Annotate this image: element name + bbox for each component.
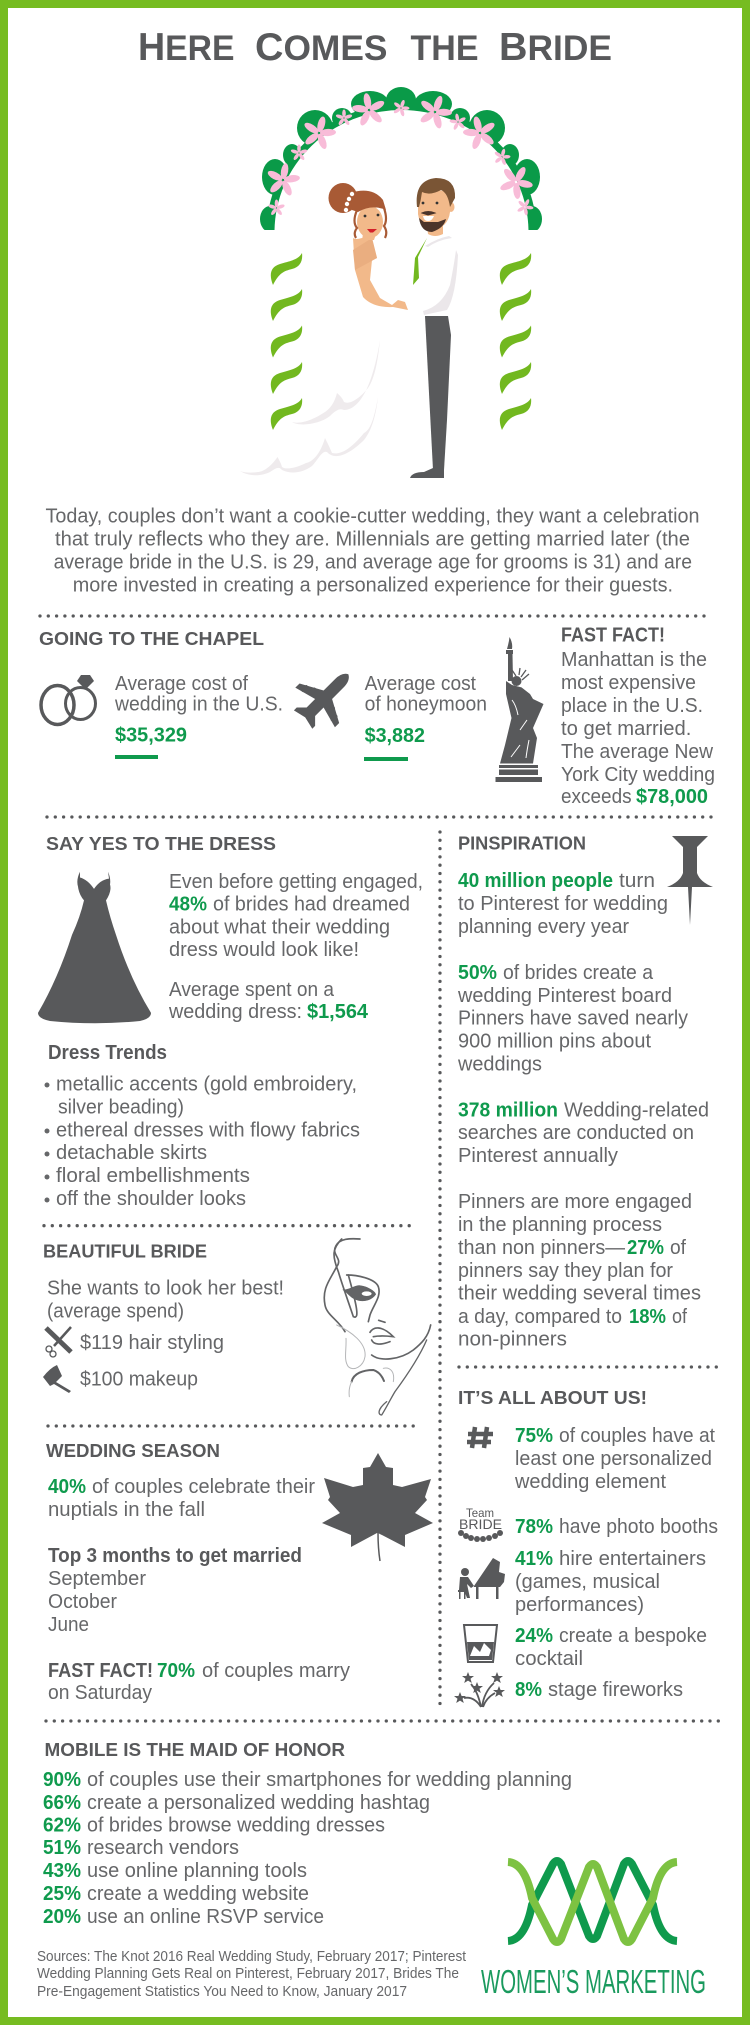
icon: plane — [283, 654, 368, 739]
icon: maple leaf — [322, 1453, 433, 1561]
fast fact: manhattan: The average New — [561, 741, 714, 763]
fast fact: manhattan: $78,000 — [636, 786, 708, 808]
icon: team bride — [458, 1506, 503, 1542]
panel: say yes to the dress — [38, 834, 423, 1210]
engaged pinners stat: of — [670, 1237, 686, 1259]
mobile stats list: 25% — [43, 1883, 81, 1905]
40 million stat: to Pinterest for wedding — [458, 893, 668, 915]
floral arch — [260, 87, 542, 230]
icon: cocktail glass — [464, 1625, 497, 1662]
icon: comb and scissors — [46, 1327, 71, 1357]
icon: piano player — [458, 1558, 505, 1599]
stat: entertainers: (games, musical — [515, 1571, 660, 1593]
50 percent stat: of brides create a — [503, 962, 654, 984]
icon: rings — [41, 675, 96, 724]
icon: statue of liberty — [496, 637, 544, 782]
dress dream text: 48% — [169, 894, 207, 916]
intro paragraph: more invested in creating a personalized experience for their guests. — [73, 575, 673, 597]
fast fact: manhattan: to get married. — [561, 718, 691, 740]
dress trends list: floral embellishments — [56, 1165, 250, 1187]
mobile stats list: create a wedding website — [87, 1883, 309, 1905]
cost of honeymoon: of honeymoon — [365, 694, 487, 716]
50 percent stat: weddings — [457, 1054, 542, 1076]
icon: dress — [38, 872, 151, 1023]
panel: it's all about us — [454, 1388, 718, 1707]
dress trends list: off the shoulder looks — [56, 1188, 246, 1210]
sources: Pre-Engagement Statistics You Need to Know, January 2017 — [37, 1984, 407, 2000]
icon: team bride: Team — [466, 1506, 494, 1520]
fast fact: saturday: FAST FACT! — [48, 1660, 153, 1682]
engaged pinners stat: of — [672, 1306, 687, 1328]
dress dream text: of brides had dreamed — [213, 894, 410, 916]
panel: mobile is the maid of honor — [43, 1740, 572, 1928]
stat: entertainers — [515, 1548, 706, 1616]
fast fact: manhattan: place in the U.S. — [561, 695, 703, 717]
40 million stat: planning every year — [458, 916, 629, 938]
dress trends list: Dress Trends — [48, 1042, 167, 1064]
378 million stat — [458, 1099, 709, 1167]
stat: bespoke cocktail — [515, 1625, 707, 1670]
stat: entertainers: 41% — [515, 1548, 553, 1570]
heading: MOBILE IS THE MAID OF HONOR — [44, 1740, 345, 1760]
fast fact: manhattan: most expensive — [561, 672, 696, 694]
fall stat: 40% — [48, 1476, 86, 1498]
50 percent stat: Pinners have saved nearly — [458, 1008, 688, 1030]
stat: fireworks: stage fireworks — [548, 1679, 683, 1701]
panel: going to the chapel — [39, 625, 715, 808]
40 million stat: turn — [619, 870, 655, 892]
cost of wedding — [114, 673, 283, 759]
intro paragraph — [46, 506, 700, 597]
icon: makeup brush — [43, 1365, 71, 1393]
cost of wedding: wedding in the U.S. — [114, 694, 283, 716]
spend text: $119 hair styling — [80, 1332, 224, 1354]
fast fact: saturday: of couples marry — [202, 1660, 350, 1682]
dress trends list: metallic accents (gold embroidery, — [56, 1074, 357, 1096]
dress dream text — [168, 871, 423, 1023]
top months: Top 3 months to get married — [48, 1545, 302, 1567]
dress dream text: $1,564 — [307, 1001, 369, 1023]
fast fact: manhattan: York City wedding — [561, 764, 715, 786]
50 percent stat: wedding Pinterest board — [457, 985, 672, 1007]
title: BRIDE — [499, 26, 612, 69]
heading: BEAUTIFUL BRIDE — [43, 1241, 207, 1261]
intro paragraph: that truly reflects who they are. Millennials are getting married later (the — [55, 529, 690, 551]
mobile stats list: research vendors — [87, 1837, 239, 1859]
engaged pinners stat: pinners say they plan for — [458, 1260, 673, 1282]
heading: GOING TO THE CHAPEL — [39, 629, 264, 649]
mobile stats list: 90% — [43, 1769, 81, 1791]
378 million stat: Wedding-related — [564, 1099, 709, 1121]
title: HERE — [138, 26, 234, 69]
fast fact: saturday: 70% — [157, 1660, 195, 1682]
logo mark — [508, 1861, 677, 1942]
engaged pinners stat: a day, compared to — [458, 1306, 622, 1328]
dress trends list: detachable skirts — [56, 1142, 207, 1164]
engaged pinners stat: 18% — [629, 1306, 666, 1328]
logo: women's marketing — [481, 1861, 706, 2000]
top months: June — [48, 1614, 89, 1636]
mobile stats list: 51% — [43, 1837, 81, 1859]
378 million stat: 378 million — [458, 1099, 558, 1121]
stat: bespoke cocktail: cocktail — [515, 1648, 583, 1670]
fast fact: manhattan: FAST FACT! — [561, 625, 665, 647]
mobile stats list: of brides browse wedding dresses — [87, 1814, 385, 1836]
engaged pinners stat: than non pinners— — [458, 1237, 625, 1259]
intro paragraph: Today, couples don’t want a cookie-cutter wedding, they want a celebration — [46, 506, 700, 528]
stat: personalized element: wedding element — [514, 1471, 666, 1493]
40 million stat — [458, 870, 668, 938]
dress dream text: Even before getting engaged, — [169, 871, 423, 893]
50 percent stat — [457, 962, 688, 1076]
top months: October — [48, 1591, 117, 1613]
dress dream text: Average spent on a — [169, 979, 335, 1001]
40 million stat: 40 million people — [458, 870, 613, 892]
top months — [48, 1545, 302, 1636]
mobile stats list: of couples use their smartphones for wedding planning — [87, 1769, 572, 1791]
sources: Wedding Planning Gets Real on Pinterest, February 2017, Brides The — [37, 1966, 459, 1982]
panel: pinspiration — [457, 834, 713, 1351]
spend text: (average spend) — [47, 1300, 184, 1322]
fall stat: of couples celebrate their — [92, 1476, 315, 1498]
icon: fireworks — [454, 1672, 505, 1707]
stat: personalized element — [514, 1425, 715, 1493]
mobile stats list: create a personalized wedding hashtag — [87, 1792, 430, 1814]
fast fact: manhattan: Manhattan is the — [561, 649, 707, 671]
dress dream text: wedding dress: — [168, 1001, 302, 1023]
stat: bespoke cocktail: 24% — [515, 1625, 553, 1647]
illustration: couple under floral arch — [240, 87, 542, 478]
top months: September — [48, 1568, 146, 1590]
mobile stats list: 20% — [43, 1906, 81, 1928]
dress dream text: about what their wedding — [169, 917, 390, 939]
mobile stats list: 43% — [43, 1860, 81, 1882]
stat: personalized element: least one personalized — [515, 1448, 712, 1470]
mobile stats list: 66% — [43, 1792, 81, 1814]
mobile stats list: use an online RSVP service — [87, 1906, 324, 1928]
dress trends list: ethereal dresses with flowy fabrics — [56, 1120, 360, 1142]
dress trends list — [44, 1042, 360, 1210]
378 million stat: searches are conducted on — [458, 1122, 694, 1144]
engaged pinners stat: non-pinners — [458, 1329, 567, 1351]
fast fact: manhattan: exceeds — [561, 786, 632, 808]
mobile stats list — [43, 1769, 572, 1928]
fall stat: nuptials in the fall — [48, 1499, 205, 1521]
dress dream text: dress would look like! — [169, 939, 359, 961]
panel: beautiful bride — [43, 1239, 431, 1415]
spend text: She wants to look her best! — [47, 1278, 284, 1300]
engaged pinners stat: Pinners are more engaged — [458, 1191, 692, 1213]
stat: personalized element: of couples have at — [559, 1425, 715, 1447]
fall stat — [48, 1476, 315, 1521]
stat: entertainers: hire entertainers — [559, 1548, 706, 1570]
icon: hashtag — [467, 1427, 493, 1448]
fast fact: saturday: on Saturday — [48, 1682, 152, 1704]
heading: PINSPIRATION — [458, 834, 586, 854]
title: THE — [410, 29, 478, 68]
cost of honeymoon: $3,882 — [365, 725, 425, 747]
groom — [410, 178, 458, 478]
engaged pinners stat: 27% — [627, 1237, 664, 1259]
mobile stats list: use online planning tools — [87, 1860, 307, 1882]
spend text: $100 makeup — [80, 1369, 198, 1391]
50 percent stat: 900 million pins about — [458, 1030, 651, 1052]
heading: SAY YES TO THE DRESS — [46, 834, 276, 854]
title — [138, 26, 612, 69]
stat: fireworks: 8% — [515, 1679, 542, 1701]
fast fact: manhattan — [561, 625, 715, 808]
stat: photo booths: have photo booths — [559, 1516, 718, 1538]
engaged pinners stat: their wedding several times — [458, 1283, 701, 1305]
sources — [37, 1949, 466, 2000]
panel: wedding season — [46, 1441, 433, 1704]
title: COMES — [255, 26, 388, 69]
spend text — [47, 1278, 284, 1391]
stat: entertainers: performances) — [515, 1594, 644, 1616]
cost of honeymoon — [364, 673, 487, 761]
stat: photo booths: 78% — [515, 1516, 553, 1538]
stat: personalized element: 75% — [515, 1425, 553, 1447]
fast fact: saturday — [48, 1660, 350, 1704]
378 million stat: Pinterest annually — [458, 1145, 618, 1167]
dress trends list: silver beading) — [58, 1096, 184, 1118]
heading: IT’S ALL ABOUT US! — [458, 1388, 647, 1408]
icon: face line art — [324, 1239, 431, 1415]
intro paragraph: average bride in the U.S. is 29, and average age for grooms is 31) and are — [54, 552, 692, 574]
icon: push pin — [667, 836, 713, 925]
stat: bespoke cocktail: create a bespoke — [559, 1625, 707, 1647]
engaged pinners stat — [458, 1191, 701, 1351]
heading: WEDDING SEASON — [46, 1441, 220, 1461]
bride — [240, 183, 408, 475]
cost of wedding: $35,329 — [115, 725, 187, 747]
sources: Sources: The Knot 2016 Real Wedding Study, February 2017; Pinterest — [37, 1949, 466, 1965]
engaged pinners stat: in the planning process — [458, 1214, 662, 1236]
icon: team bride: BRIDE — [459, 1516, 502, 1532]
hanging leaves — [271, 253, 531, 430]
50 percent stat: 50% — [458, 962, 497, 984]
cost of wedding: Average cost of — [115, 673, 248, 695]
mobile stats list: 62% — [43, 1814, 81, 1836]
cost of honeymoon: Average cost — [365, 673, 476, 695]
